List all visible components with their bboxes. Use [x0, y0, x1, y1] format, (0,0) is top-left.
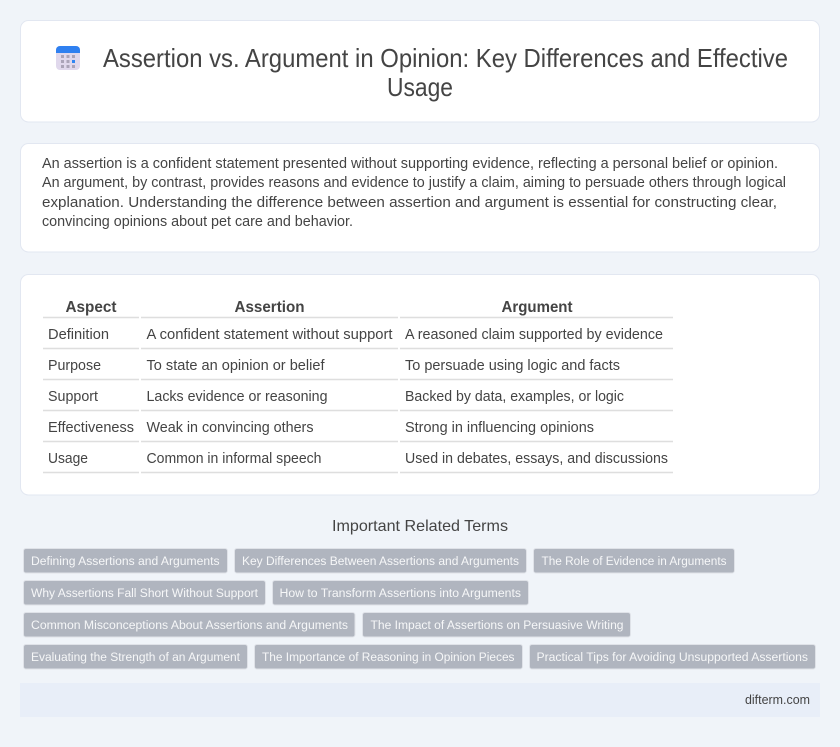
panel: introduction text: An argument, by contrast, provides reasons and evidence to justify a claim, aiming to persuade others through logical	[42, 175, 786, 191]
tag	[362, 612, 630, 637]
table header	[66, 299, 573, 316]
tag	[24, 580, 266, 605]
tag: The Importance of Reasoning in Opinion Pieces	[262, 650, 514, 664]
table header: Assertion	[234, 299, 304, 316]
panel: introduction text: convincing opinions about pet care and behavior.	[42, 214, 353, 230]
tag	[24, 644, 248, 669]
tag: Defining Assertions and Arguments	[31, 554, 220, 568]
row: usage: Usage	[48, 451, 88, 467]
icon: calendar	[56, 46, 80, 70]
footer: difterm.com	[745, 692, 810, 707]
row: usage: Common in informal speech	[146, 451, 322, 467]
row: effectiveness: Weak in convincing others	[146, 420, 314, 436]
row: support: Backed by data, examples, or logic	[405, 389, 624, 405]
row: purpose: Purpose	[48, 358, 101, 374]
tag: Practical Tips for Avoiding Unsupported Assertions	[536, 650, 808, 664]
panel: title header: Usage	[387, 74, 453, 102]
row: purpose	[48, 358, 620, 374]
row: definition: Definition	[48, 327, 109, 343]
panel: introduction text: explanation. Understanding the difference between assertion and argument is essential for constructing clear,	[42, 195, 777, 211]
tag	[24, 548, 228, 573]
table header: Aspect	[66, 299, 117, 316]
panel: introduction text	[20, 144, 820, 252]
row: usage	[48, 451, 668, 467]
panel: comparison table	[20, 274, 820, 495]
tag: Evaluating the Strength of an Argument	[31, 650, 241, 664]
tag	[24, 612, 355, 637]
title: Assertion vs. Argument in Opinion: Key Differences and Effective	[103, 45, 788, 73]
related term tags	[24, 548, 816, 669]
row: definition	[48, 327, 663, 343]
row: definition: A confident statement without support	[146, 327, 392, 343]
row: purpose: To persuade using logic and facts	[405, 358, 620, 374]
tag	[534, 548, 734, 573]
table header: Argument	[502, 299, 573, 316]
tag: How to Transform Assertions into Arguments	[280, 586, 521, 600]
row: usage: Used in debates, essays, and discussions	[405, 451, 668, 467]
footer	[20, 683, 820, 717]
heading: important related terms: Important Related Terms	[332, 518, 508, 535]
tag: Common Misconceptions About Assertions and Arguments	[31, 618, 348, 632]
tag: Key Differences Between Assertions and Arguments	[242, 554, 519, 568]
row: purpose: To state an opinion or belief	[146, 358, 326, 374]
panel: title header	[20, 20, 820, 122]
row: effectiveness: Strong in influencing opinions	[405, 420, 594, 436]
tag	[530, 644, 816, 669]
row: support: Support	[48, 389, 98, 405]
row: support: Lacks evidence or reasoning	[146, 389, 328, 405]
tag: Why Assertions Fall Short Without Support	[31, 586, 259, 600]
row: support	[48, 389, 624, 405]
tag	[254, 644, 522, 669]
row: definition: A reasoned claim supported by evidence	[405, 327, 663, 343]
tag	[234, 548, 526, 573]
row: effectiveness	[48, 420, 594, 436]
panel: introduction text: An assertion is a confident statement presented without supporting evidence, reflecting a personal belief or opinion.	[42, 156, 778, 172]
row: effectiveness: Effectiveness	[48, 420, 134, 436]
tag: The Role of Evidence in Arguments	[542, 554, 726, 568]
tag: The Impact of Assertions on Persuasive Writing	[370, 618, 624, 632]
tag	[272, 580, 528, 605]
